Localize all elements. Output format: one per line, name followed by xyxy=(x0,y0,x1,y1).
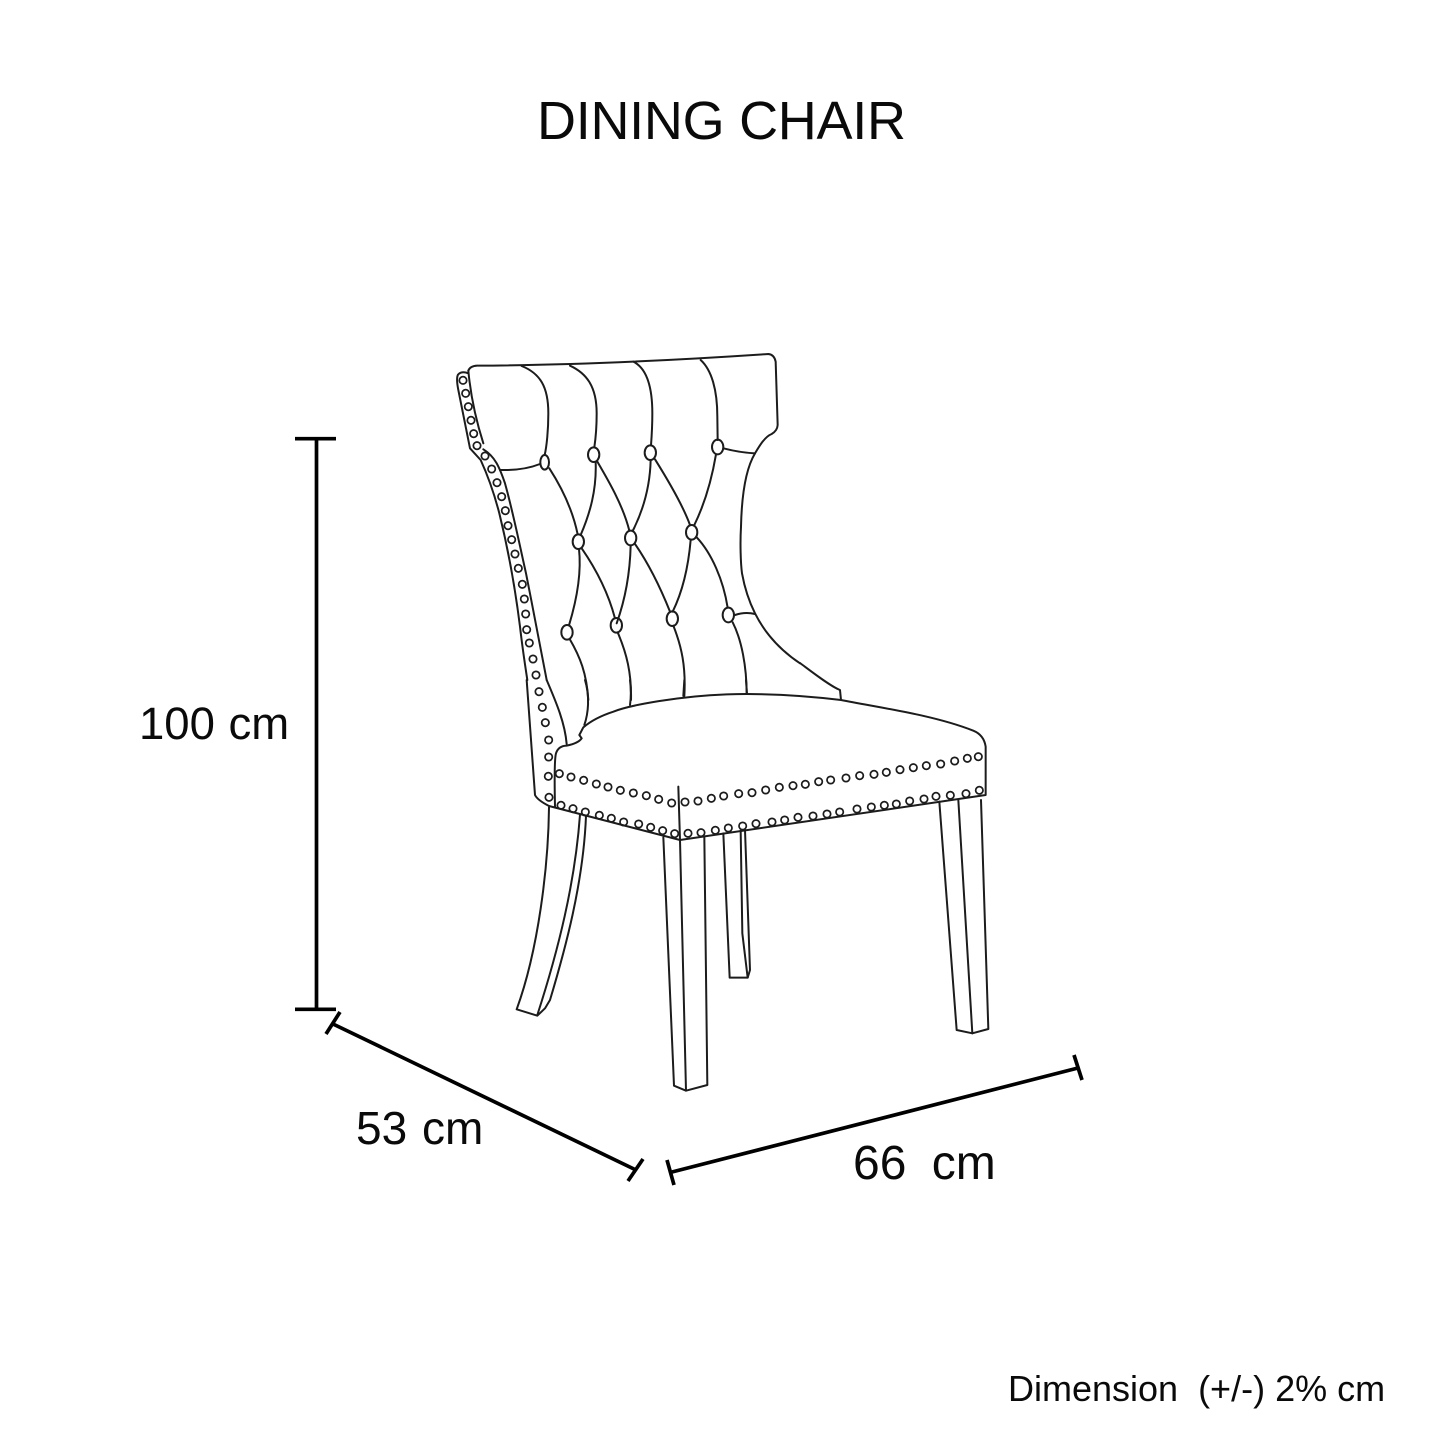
depth label: 53 cm xyxy=(356,1102,483,1154)
width label: 66 cm xyxy=(853,1137,996,1190)
depth dimension line xyxy=(326,1012,643,1181)
title: DINING CHAIR xyxy=(537,91,906,151)
width dimension line xyxy=(667,1055,1082,1185)
height dimension line xyxy=(295,439,336,1009)
height label: 100 cm xyxy=(139,698,289,749)
tufting buttons xyxy=(540,440,734,640)
chair line drawing xyxy=(457,354,988,1091)
front leg xyxy=(663,837,707,1091)
seat outline xyxy=(527,663,986,840)
nail studs on seat and lower back xyxy=(539,704,983,837)
back left curved leg xyxy=(517,807,586,1016)
tolerance note: Dimension (+/-) 2% cm xyxy=(1008,1368,1385,1409)
nail strip outline xyxy=(457,372,547,680)
right leg xyxy=(939,800,988,1033)
rear leg xyxy=(723,830,750,978)
chair back outline xyxy=(468,354,800,663)
back tufting seams xyxy=(522,360,747,700)
nail studs on back edge xyxy=(459,377,543,695)
chair legs xyxy=(517,800,988,1091)
